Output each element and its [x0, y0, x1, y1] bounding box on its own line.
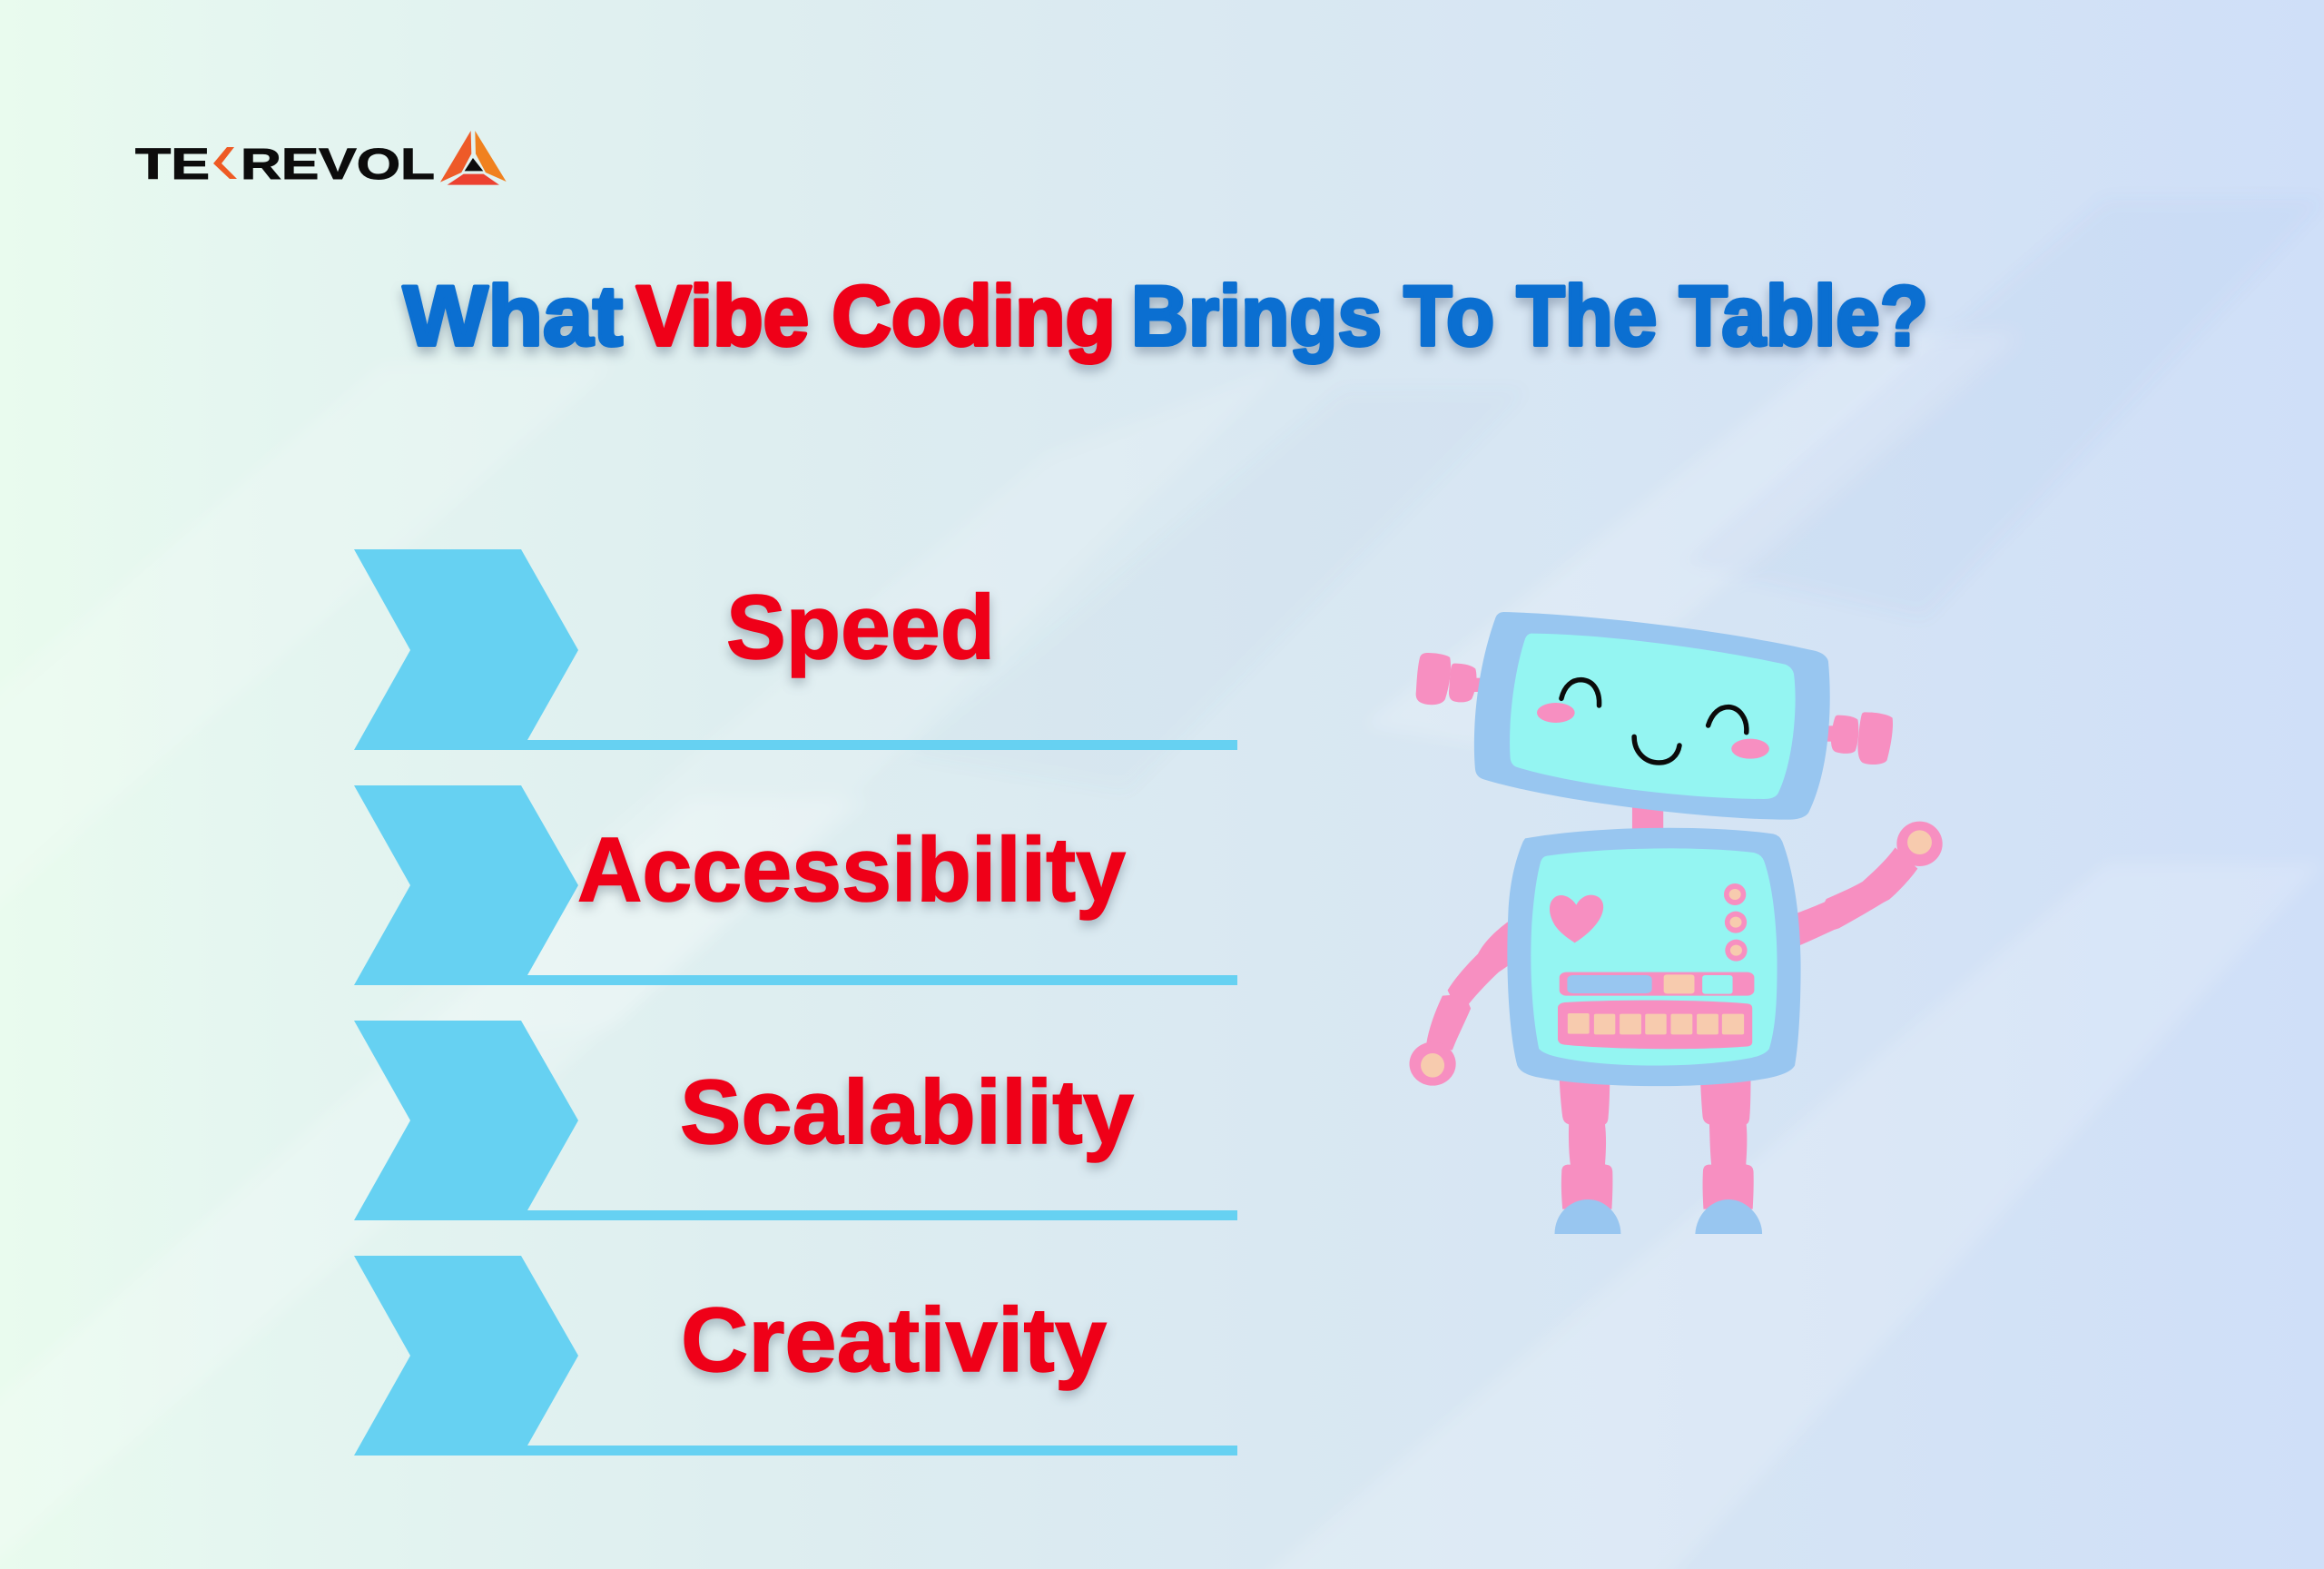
label: Accessibility: Accessibility: [577, 819, 1126, 921]
title: [403, 268, 1928, 363]
chevron and underline: Scalability: [354, 1021, 1237, 1220]
robot neck: [1632, 805, 1663, 831]
title: Brings To The Table?: [1131, 268, 1928, 363]
robot keyboard: [1558, 1001, 1752, 1049]
robot right eye: [1709, 707, 1747, 733]
logo triangle mark: [440, 131, 507, 185]
robot right arm: [1797, 822, 1943, 946]
robot right leg: [1695, 1078, 1762, 1234]
label: Creativity: Creativity: [681, 1289, 1107, 1391]
robot buttons: [1724, 883, 1748, 962]
logo wordmark: TE: [135, 141, 210, 189]
logo: Tekrevol: [135, 131, 507, 189]
label: Scalability: Scalability: [680, 1061, 1134, 1163]
robot right cheek: [1731, 739, 1769, 759]
robot left leg: [1554, 1078, 1620, 1234]
title: Vibe Coding: [636, 268, 1116, 363]
title: What: [403, 268, 623, 363]
list row: Speed: [354, 549, 1237, 750]
robot right foot: [1695, 1199, 1762, 1234]
list row: Creativity: [354, 1256, 1237, 1456]
robot control bar: [1560, 972, 1754, 996]
label: Speed: Speed: [726, 577, 995, 678]
robot left cheek: [1537, 703, 1575, 723]
robot head: [1474, 612, 1830, 820]
robot mouth: [1634, 736, 1679, 763]
list row: Scalability: [354, 1021, 1237, 1220]
robot heart: [1550, 895, 1603, 942]
robot illustration: [1409, 612, 1943, 1234]
robot body: [1507, 828, 1801, 1086]
list row: Accessibility: [354, 785, 1237, 985]
robot left foot: [1554, 1199, 1620, 1234]
logo wordmark: [135, 141, 435, 189]
logo wordmark: REVOL: [241, 141, 435, 189]
robot left eye: [1561, 680, 1600, 706]
chevron and underline: Creativity: [354, 1256, 1237, 1456]
robot right ear: [1826, 712, 1893, 765]
chevron and underline: Speed: [354, 549, 1237, 750]
chevron and underline: Accessibility: [354, 785, 1237, 985]
robot left arm: [1409, 921, 1510, 1086]
robot left ear: [1416, 653, 1483, 705]
